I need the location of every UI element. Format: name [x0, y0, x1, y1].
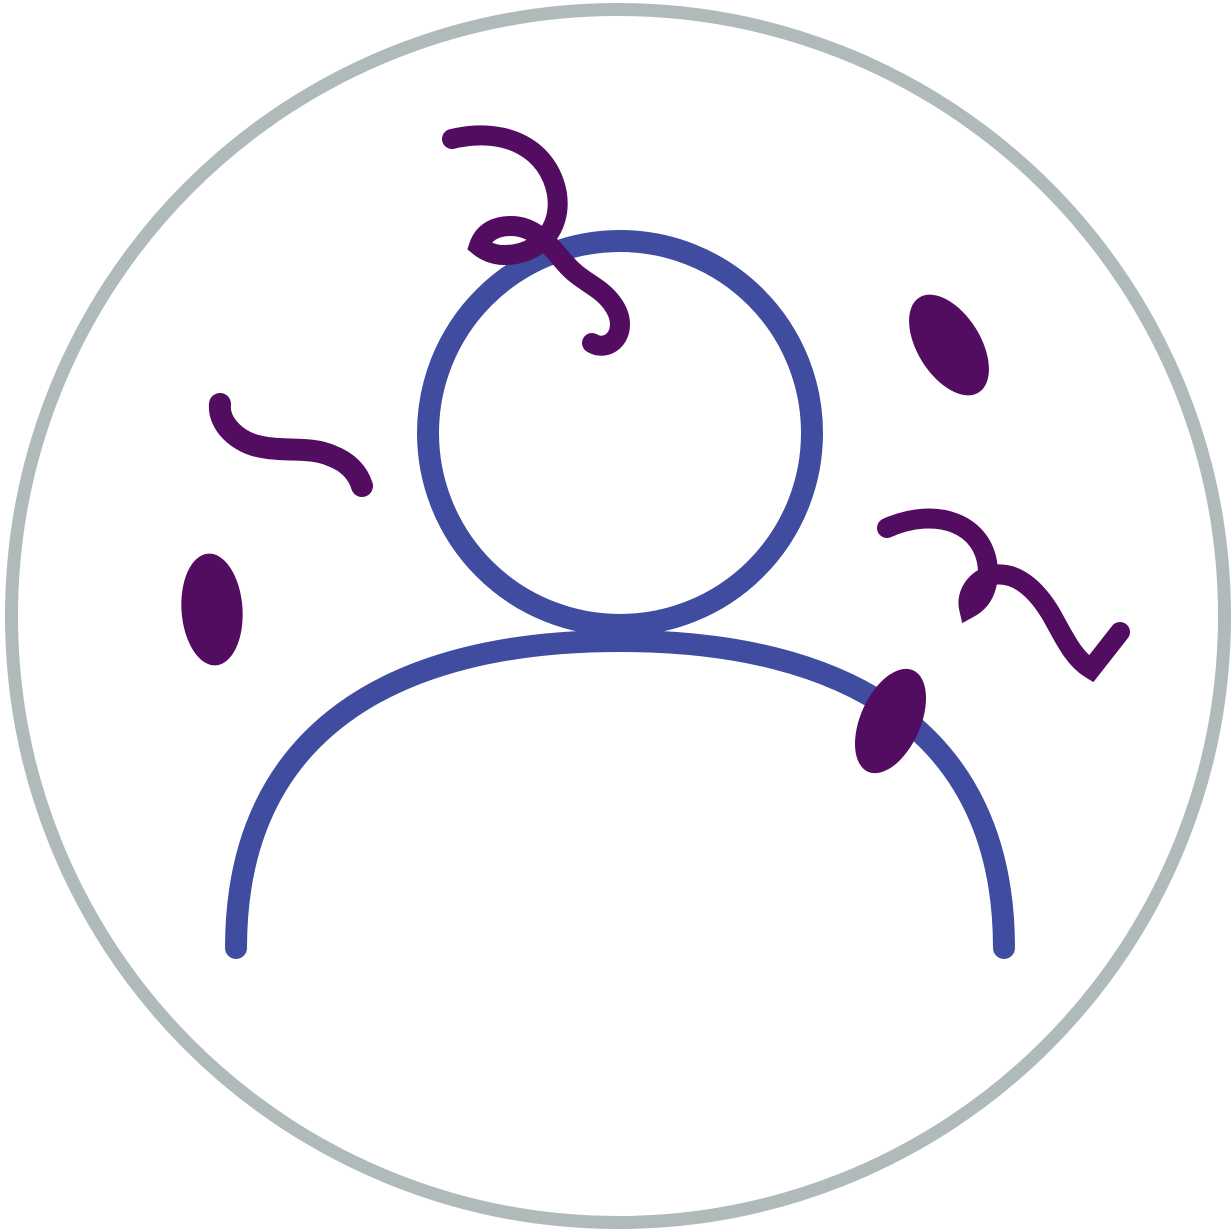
microbe: oval left [178, 552, 246, 667]
microbe: curly right [887, 519, 1120, 669]
microbe: curly top [452, 135, 620, 346]
microbe: oval on shoulder [841, 658, 940, 784]
person: shoulders [236, 641, 1004, 948]
microbe: oval top right [893, 281, 1005, 409]
microbe: squiggle left [220, 404, 362, 486]
person: head [428, 241, 812, 625]
